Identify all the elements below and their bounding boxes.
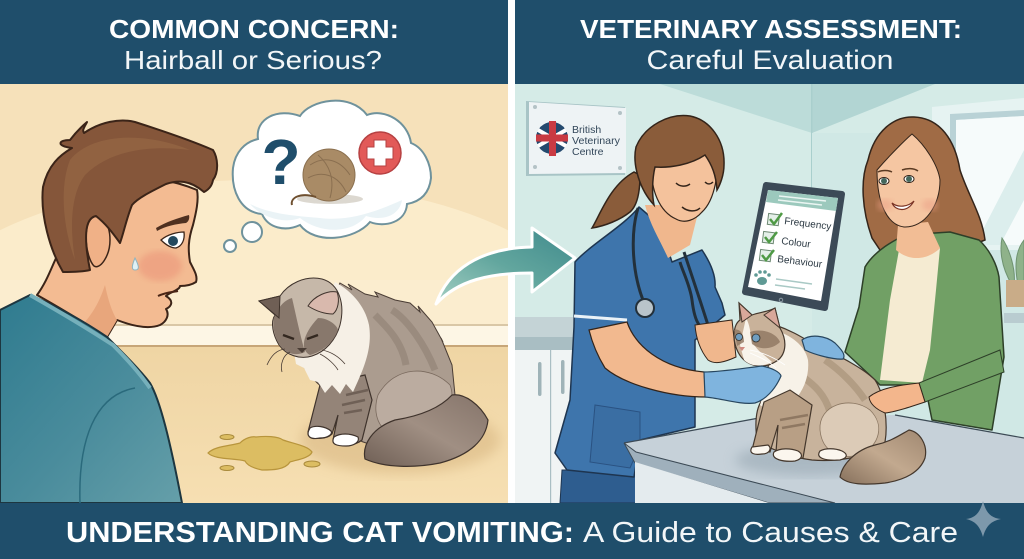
panel: veterinary assessment scene [515,84,1024,503]
man: eyebrow [156,215,189,231]
man: mouth [158,291,178,296]
floor shadow [300,406,500,474]
header: veterinary assessment [515,0,1024,84]
checklist items: Behaviour [777,254,823,271]
cat: paws [751,445,846,461]
owner: hair back [863,117,985,250]
exam table [624,415,1024,503]
tablet checklist [745,185,842,308]
cat: tail [364,395,488,466]
man: neck and face [37,178,198,337]
cat: whiskers [750,350,785,368]
nurse: hair [635,116,724,205]
icon: paw [754,270,771,285]
cat: nose [739,347,745,351]
wall sign: British Veterinary Centre: Centre [572,146,604,158]
nurse glove on cat chin [704,366,781,403]
header: common concern [0,0,508,84]
worried man [0,120,217,503]
wall sign: British Veterinary Centre: Veterinary [572,135,621,147]
nurse: tunic [555,207,725,477]
cat: head [259,278,342,357]
nurse: eyes and mouth [676,182,713,211]
footer banner: A Guide to Causes & Care [583,517,958,549]
man: tear drop [132,258,138,270]
cat: eyes [736,334,760,342]
pet owner [845,117,1004,430]
plant and pot [1001,238,1024,323]
owner: face [877,134,940,227]
nurse: near arm [589,322,706,397]
cat: white ruff [760,330,808,412]
nurse: ponytail [592,172,640,228]
owner: sleeve [919,350,1004,402]
checklist items: Colour [781,236,812,251]
cat: front legs [752,390,812,460]
icon: sparkle [966,501,1001,537]
sick cat on floor [259,278,500,474]
header: veterinary assessment: VETERINARY ASSESSMENT: [580,14,962,44]
header: veterinary assessment: Careful Evaluation [646,45,894,75]
vet nurse [555,116,736,503]
table shadow [735,444,885,476]
white divider [508,0,515,503]
cat: ear [308,292,338,314]
window [932,98,1024,250]
header: common concern: COMMON CONCERN: [109,14,399,44]
footer banner [0,501,1024,559]
man: hair [42,120,217,272]
owner: neck [896,222,940,258]
man: ear [86,216,110,267]
cat: body [300,283,455,446]
checklist items: Frequency [784,216,832,233]
cat: tail [840,430,926,484]
wall sign: British Veterinary Centre: British [572,124,601,136]
nurse: face [652,150,717,221]
counter and cabinets [515,317,585,503]
owner: eyes and smile [878,169,918,210]
cat: front legs [308,375,372,445]
checklist items [759,213,832,271]
thought cloud [224,101,431,252]
owner: top [880,248,940,383]
nurse: neck [645,205,700,258]
panel: common concern scene [0,84,594,503]
cat: white ruff [294,282,370,394]
wall sign: British Veterinary Centre [526,101,626,176]
nurse glove on cat back [802,336,844,359]
nurse: stethoscope [633,208,708,328]
cat: body [756,325,886,460]
footer banner: UNDERSTANDING CAT VOMITING: [66,517,574,549]
header: common concern: Hairball or Serious? [124,45,382,75]
cat: eyes [283,335,318,339]
cat: head [734,303,785,366]
cat: whiskers [267,349,345,372]
cat: nose [297,348,307,353]
cat: paws [308,426,358,446]
owner: cardigan [845,232,1004,430]
vomit puddle [208,434,320,470]
man: shirt [0,295,182,503]
nurse: pants [560,470,638,503]
question mark: ? [261,126,301,198]
man: eye [161,232,184,248]
flag emblem [536,121,568,156]
cat on table [734,303,926,484]
thought bubbles [224,222,262,252]
icon: medical cross [359,132,401,174]
icon: hairball [292,149,363,205]
arrow between panels [436,228,575,304]
owner hand on cat [869,383,925,413]
nurse: far arm [695,320,736,363]
